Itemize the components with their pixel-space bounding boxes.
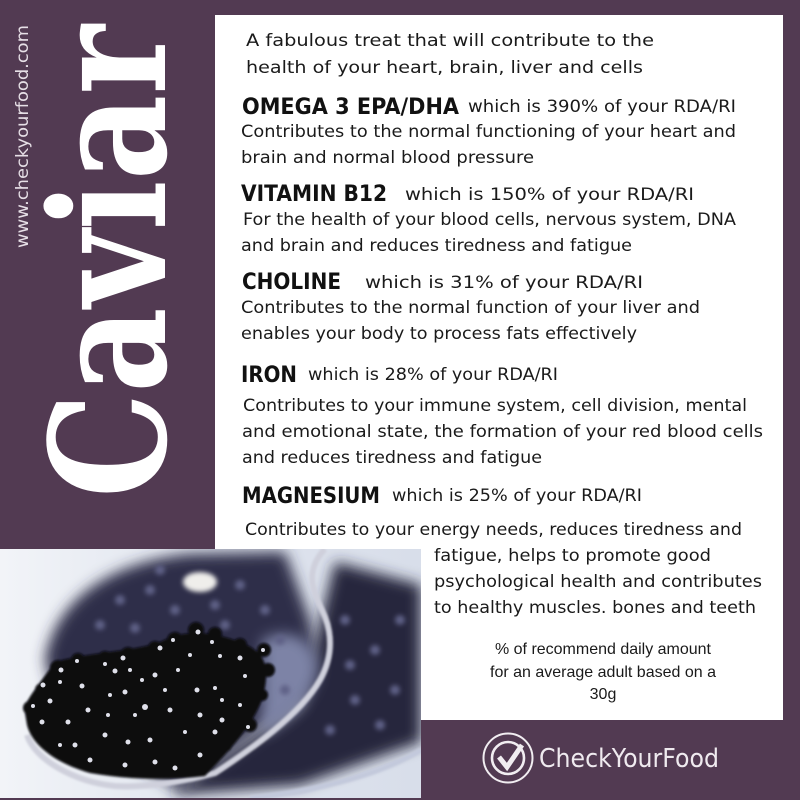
website url: www.checkyourfood.com	[13, 25, 32, 248]
nutrient: omega 3: OMEGA 3 EPA/DHA	[242, 95, 459, 120]
intro text: health of your heart, brain, liver and cells	[246, 58, 643, 78]
nutrient: iron	[241, 363, 763, 468]
footnote: % of recommend daily amount	[495, 641, 712, 658]
nutrient: omega 3: brain and normal blood pressure	[241, 148, 534, 168]
nutrient: iron: and emotional state, the formation of your red blood cells	[242, 422, 763, 442]
nutrient: choline: Contributes to the normal function of your liver and	[241, 298, 700, 318]
nutrient: choline: CHOLINE	[242, 270, 341, 295]
footnote	[490, 641, 716, 703]
nutrient: vitamin b12: which is 150% of your RDA/RI	[405, 185, 694, 205]
nutrient: vitamin b12: For the health of your blood cells, nervous system, DNA	[243, 210, 736, 230]
footnote: for an average adult based on a	[490, 664, 716, 681]
nutrient: choline: enables your body to process fats effectively	[241, 324, 637, 344]
nutrient: magnesium: psychological health and contributes	[434, 572, 762, 592]
nutrient: magnesium: Contributes to your energy needs, reduces tiredness and	[245, 520, 742, 540]
nutrient: choline	[241, 270, 700, 344]
nutrient: iron: which is 28% of your RDA/RI	[308, 365, 558, 385]
nutrient: vitamin b12: and brain and reduces tiredness and fatigue	[241, 236, 632, 256]
glass rim	[250, 750, 421, 798]
nutrient: choline: which is 31% of your RDA/RI	[365, 273, 643, 293]
photo: caviar on a spoon	[0, 549, 421, 798]
nutrient: iron: IRON	[241, 363, 297, 388]
intro text	[246, 31, 654, 78]
caviar on spoon	[23, 622, 275, 779]
nutrient: magnesium: MAGNESIUM	[242, 484, 380, 509]
nutrient: magnesium: which is 25% of your RDA/RI	[392, 486, 642, 506]
nutrient: omega 3	[241, 95, 736, 168]
nutrient: vitamin b12	[241, 182, 736, 256]
nutrient: iron: and reduces tiredness and fatigue	[242, 448, 542, 468]
nutrient: omega 3: Contributes to the normal functioning of your heart and	[241, 122, 736, 142]
nutrient: magnesium: to healthy muscles. bones and teeth	[434, 598, 756, 618]
footnote: 30g	[590, 686, 616, 703]
panel: white text panel	[215, 15, 783, 720]
nutrient: magnesium	[242, 484, 762, 618]
logo: CheckYourFood	[484, 734, 719, 782]
nutrient: omega 3: which is 390% of your RDA/RI	[468, 97, 736, 117]
nutrient: vitamin b12: VITAMIN B12	[241, 182, 387, 207]
logo wordmark: CheckYourFood	[539, 744, 719, 774]
logo icon: check in circle	[484, 734, 532, 782]
nutrient: magnesium: fatigue, helps to promote good	[434, 546, 711, 566]
nutrient: iron: Contributes to your immune system, cell division, mental	[243, 396, 747, 416]
intro text: A fabulous treat that will contribute to the	[246, 31, 654, 51]
spoon rim	[27, 549, 330, 786]
